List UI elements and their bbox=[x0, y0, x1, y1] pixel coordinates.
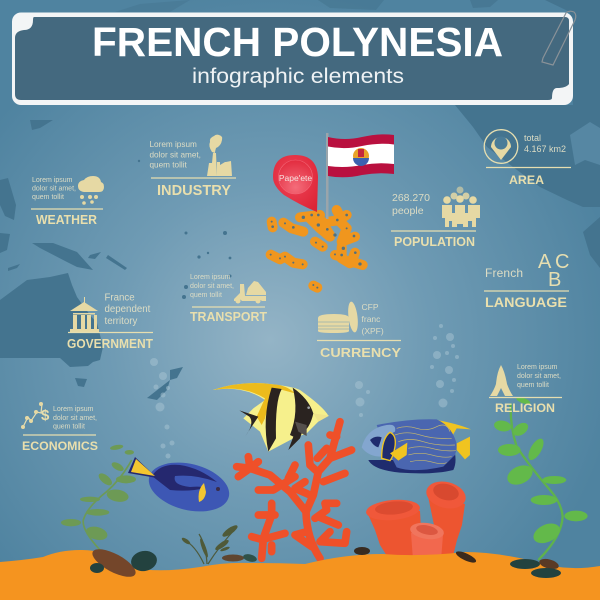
world map landmasses bbox=[0, 0, 600, 400]
title banner bbox=[12, 11, 576, 105]
area text: 4.167 km2 bbox=[524, 144, 566, 154]
weather heading: WEATHER bbox=[36, 213, 97, 227]
language heading: LANGUAGE bbox=[485, 294, 567, 310]
industry heading: INDUSTRY bbox=[157, 182, 231, 199]
flag cloth bbox=[328, 134, 394, 177]
icon: growth chart: $ bbox=[41, 407, 50, 424]
banner title: FRENCH POLYNESIA bbox=[92, 19, 503, 65]
economics text: dolor sit amet, bbox=[53, 415, 97, 422]
panel: language bbox=[484, 251, 569, 310]
economics heading: ECONOMICS bbox=[22, 439, 98, 453]
small dark plant bbox=[181, 523, 239, 564]
population text: people bbox=[392, 205, 424, 217]
currency text: CFP bbox=[362, 302, 379, 312]
left seaweed bbox=[61, 444, 136, 550]
religion text: Lorem ipsum bbox=[517, 364, 558, 371]
flag pole bbox=[326, 133, 328, 219]
icon: paper clip bbox=[542, 11, 576, 65]
religion text: dolor sit amet, bbox=[517, 373, 561, 380]
panel: economics bbox=[21, 402, 98, 453]
currency text: (XPF) bbox=[362, 326, 384, 336]
weather text: dolor sit amet, bbox=[32, 186, 76, 192]
currency heading: CURRENCY bbox=[320, 345, 401, 360]
map of French Polynesia islands bbox=[270, 210, 363, 289]
orange sand seabed bbox=[0, 550, 600, 600]
moorish idol fish bbox=[213, 383, 329, 452]
panel: transport bbox=[190, 274, 267, 324]
government text: dependent bbox=[104, 304, 151, 315]
panel: industry bbox=[150, 135, 236, 199]
transport text: quem tollit bbox=[190, 292, 222, 299]
gulf water bbox=[570, 122, 600, 165]
economics text: Lorem ipsum bbox=[53, 406, 94, 413]
religion text: quem tollit bbox=[517, 382, 549, 389]
emperor angelfish bbox=[362, 419, 471, 473]
right seaweed bbox=[493, 396, 588, 560]
panel: population bbox=[391, 186, 480, 249]
religion heading: RELIGION bbox=[495, 401, 555, 415]
language text: French bbox=[485, 266, 523, 280]
panel: religion bbox=[489, 364, 562, 415]
area heading: AREA bbox=[509, 173, 544, 187]
icon: government building bbox=[70, 297, 99, 332]
seabed stones bbox=[89, 544, 561, 582]
weather text: quem tollit bbox=[32, 194, 64, 201]
population text: 268.270 bbox=[392, 192, 430, 204]
panel: government bbox=[67, 292, 153, 351]
industry text: quem tollit bbox=[150, 160, 188, 170]
small tube sponge bbox=[411, 533, 443, 560]
left tube sponge bbox=[367, 511, 428, 558]
blue tang fish bbox=[128, 455, 234, 519]
transport text: Lorem ipsum bbox=[190, 274, 231, 281]
weather text: Lorem ipsum bbox=[32, 177, 73, 184]
icon: factory bbox=[207, 135, 235, 176]
population heading: POPULATION bbox=[394, 235, 475, 249]
government heading: GOVERNMENT bbox=[67, 337, 153, 351]
icon: rain cloud bbox=[78, 176, 104, 205]
transport heading: TRANSPORT bbox=[190, 309, 267, 324]
industry text: Lorem ipsum bbox=[150, 140, 197, 149]
capital map pin bbox=[273, 155, 318, 212]
air bubbles bbox=[150, 324, 459, 458]
government text: France bbox=[104, 292, 135, 304]
capital label: Pape'ete bbox=[279, 173, 312, 183]
icon: area pin in circle bbox=[484, 130, 518, 163]
icon: people group bbox=[442, 186, 480, 227]
language letters: B bbox=[548, 269, 561, 291]
icon: praying hands bbox=[490, 365, 513, 396]
panel: currency bbox=[317, 301, 401, 360]
area text: total bbox=[524, 133, 541, 143]
language letters: A bbox=[538, 251, 552, 273]
branch coral bbox=[237, 422, 352, 558]
language letters: C bbox=[555, 251, 569, 273]
industry text: dolor sit amet, bbox=[150, 150, 201, 160]
transport text: dolor sit amet, bbox=[190, 283, 234, 290]
icon: coins bbox=[318, 301, 359, 333]
government text: territory bbox=[104, 316, 137, 327]
tube sponges bbox=[365, 478, 469, 560]
panel: weather bbox=[31, 176, 104, 227]
icon: dump truck bbox=[234, 281, 266, 304]
back tube sponge bbox=[418, 496, 465, 560]
currency text: franc bbox=[362, 314, 381, 324]
flag emblem bbox=[353, 148, 369, 166]
panel: area bbox=[484, 130, 571, 187]
economics text: quem tollit bbox=[53, 424, 85, 430]
banner subtitle: infographic elements bbox=[192, 65, 404, 88]
flag of French Polynesia bbox=[326, 133, 394, 219]
small pacific islands bbox=[138, 160, 232, 299]
